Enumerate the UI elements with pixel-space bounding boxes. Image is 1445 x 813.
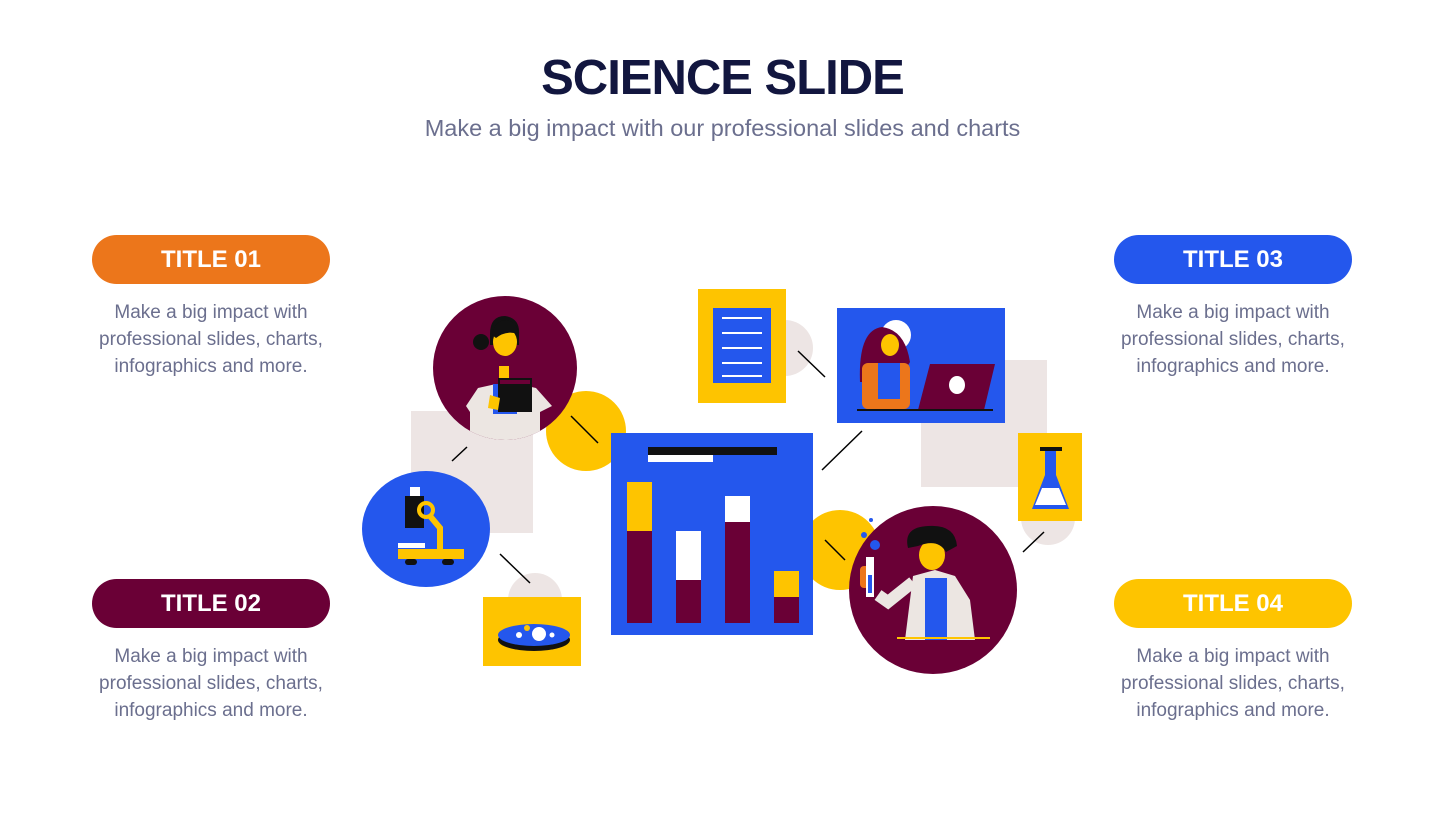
subtitle: Make a big impact with our professional slides and charts (425, 115, 1020, 141)
text block 04: Make a big impact with professional slides, charts, infographics and more. (1121, 646, 1345, 721)
icon: woman with laptop (837, 308, 1005, 423)
icon: petri dish (483, 597, 581, 666)
text block 01: Make a big impact with professional slides, charts, infographics and more. (99, 302, 323, 377)
text block 02: Make a big impact with professional slides, charts, infographics and more. (99, 646, 323, 721)
title: SCIENCE SLIDE (541, 51, 904, 105)
pill: title 04 (1114, 579, 1352, 628)
pill: title 03: TITLE 03 (1183, 246, 1283, 273)
pill: title 02 (92, 579, 330, 628)
central illustration (362, 289, 1082, 674)
text block 03: Make a big impact with professional slides, charts, infographics and more. (1121, 302, 1345, 377)
pill: title 04: TITLE 04 (1183, 590, 1283, 617)
pill: title 01 (92, 235, 330, 284)
pill: title 03 (1114, 235, 1352, 284)
pill: title 02: TITLE 02 (161, 590, 261, 617)
icon: scientist with clipboard (433, 296, 577, 440)
pill: title 01: TITLE 01 (161, 246, 261, 273)
icon: flask (1018, 433, 1082, 521)
icon: document (698, 289, 786, 403)
icon: scientist with test tube (849, 506, 1017, 674)
bar chart (611, 433, 813, 635)
icon: microscope (362, 471, 490, 587)
